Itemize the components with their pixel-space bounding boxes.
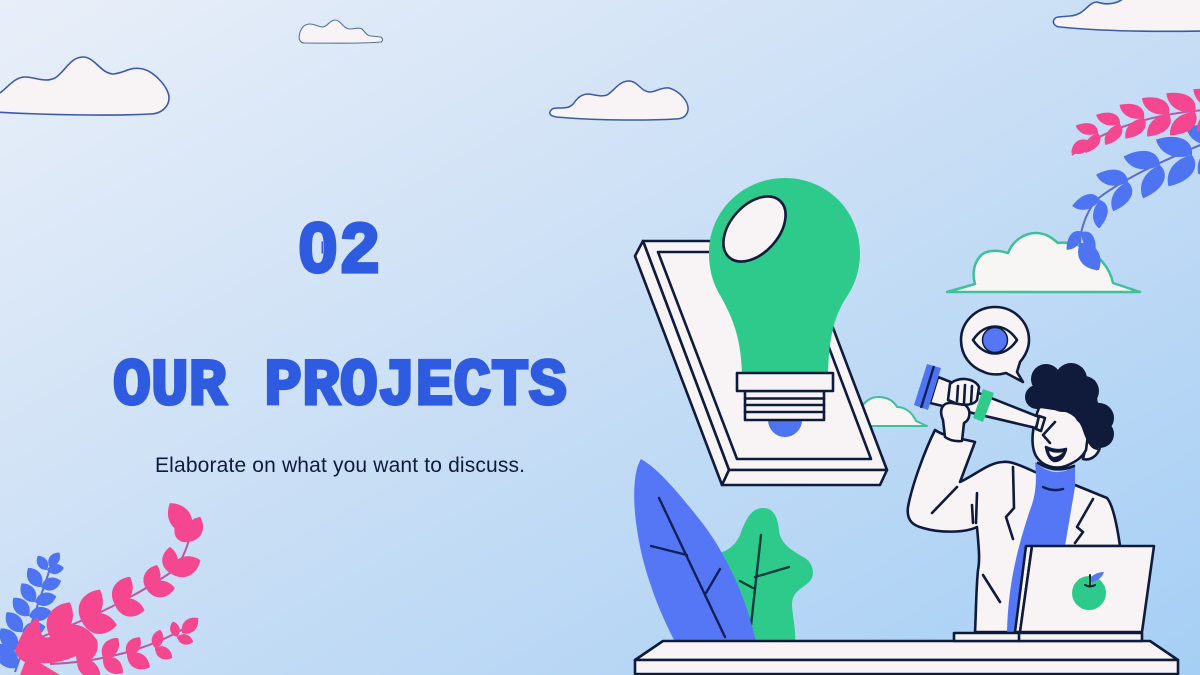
face [1033, 405, 1101, 469]
vine: bottom left blue [0, 549, 64, 674]
cloud: large green outline [947, 233, 1140, 292]
illustration: picture frame [635, 241, 887, 485]
illustration: desk [635, 641, 1178, 674]
number: 02: 02 [297, 213, 381, 295]
apple logo [1072, 572, 1106, 610]
illustration: laptop [954, 546, 1154, 641]
title: our projects: OUR PROJECTS [113, 350, 567, 424]
telescope [914, 364, 1045, 431]
scarf [1007, 462, 1075, 632]
illustration: green plant leaf [720, 508, 813, 642]
bulb screw base [737, 373, 833, 420]
bulb highlight [711, 185, 798, 273]
vine: bottom left pink [15, 497, 208, 675]
coat [908, 430, 1120, 632]
subtitle: Elaborate on what you want to discuss. [155, 454, 525, 477]
bulb glass [709, 178, 860, 374]
hair [1025, 363, 1114, 450]
vine: top right blue [1066, 119, 1200, 276]
cloud: small top centre [299, 20, 382, 43]
hand [941, 379, 979, 441]
illustration: green light bulb [709, 178, 860, 437]
cloud: top middle [550, 81, 688, 120]
illustration: person with telescope [908, 363, 1120, 632]
cloud: top right [1053, 0, 1200, 31]
cloud: top left [0, 57, 169, 115]
cloud: small green behind frame [850, 397, 927, 426]
vine: top right pink [1068, 87, 1200, 158]
bulb tip [768, 420, 802, 437]
illustration: blue plant leaf [634, 459, 756, 642]
icon: eye speech bubble [961, 307, 1029, 382]
